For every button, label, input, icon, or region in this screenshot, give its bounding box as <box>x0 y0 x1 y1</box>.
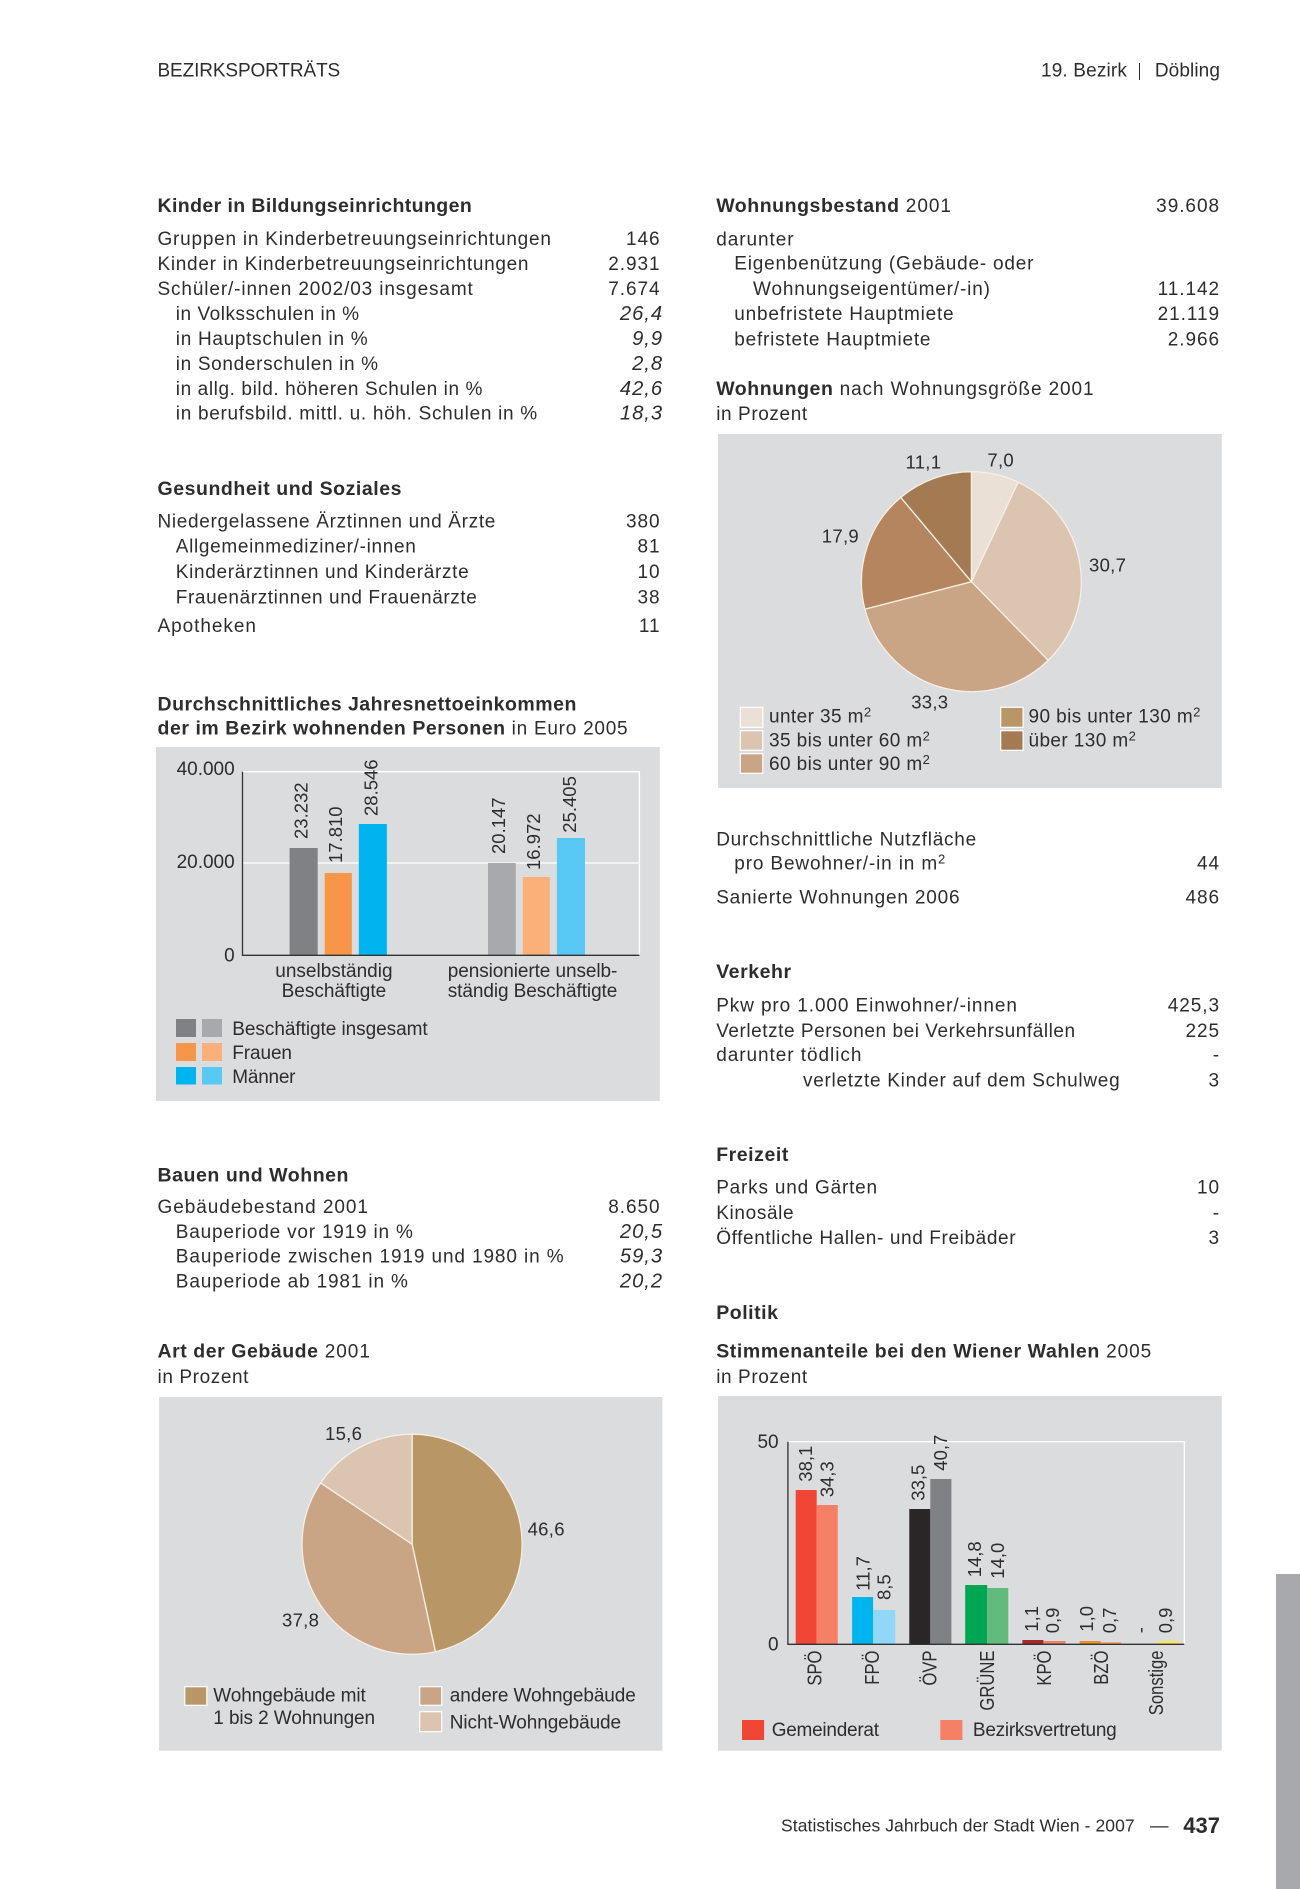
section: Freizeit: Öffentliche Hallen- und Freibäder <box>716 1228 1016 1249</box>
section: Verkehr <box>716 961 1220 1091</box>
election legend <box>742 1720 1116 1741</box>
dwelling legend: 2 <box>923 729 930 744</box>
panel: election bar chart <box>718 1396 1222 1751</box>
income value labels: 16.972 <box>523 813 544 870</box>
election value labels: 1,1 <box>1021 1606 1042 1632</box>
section: Kinder in Bildungseinrichtungen: 2.931 <box>608 254 660 275</box>
page header: 19. Bezirk <box>1041 61 1127 82</box>
dwelling legend: 2 <box>923 752 930 767</box>
heading: Art der Gebäude: Art der Gebäude 2001 <box>158 1340 371 1362</box>
section: Gesundheit und Soziales: 81 <box>637 537 660 558</box>
income value labels <box>290 759 580 870</box>
heading: Art der Gebäude: in Prozent <box>158 1367 249 1388</box>
section: Kinder in Bildungseinrichtungen: in Volksschulen in % <box>176 304 360 325</box>
election axis labels: 50 <box>757 1432 779 1453</box>
building legend: 1 bis 2 Wohnungen <box>213 1708 375 1729</box>
dwelling legend: über 130 m <box>1028 731 1129 752</box>
election bars <box>796 1479 1179 1644</box>
election value labels: 0,9 <box>1042 1608 1063 1633</box>
page footer <box>781 1813 1220 1838</box>
page footer: Statistisches Jahrbuch der Stadt Wien - 2007 <box>781 1816 1135 1836</box>
section: Kinder in Bildungseinrichtungen: 26,4 <box>619 303 663 325</box>
text block: Nutzfläche und Sanierung: Durchschnittliche Nutzfläche <box>716 830 977 850</box>
heading: Stimmenanteile: in Prozent <box>716 1367 808 1388</box>
heading: Stimmenanteile: Stimmenanteile bei den Wiener Wahlen 2005 <box>716 1340 1152 1362</box>
section: Kinder in Bildungseinrichtungen: 18,3 <box>620 402 663 424</box>
section: Freizeit: Parks und Gärten <box>716 1178 878 1199</box>
section: Gesundheit und Soziales: 10 <box>637 562 660 583</box>
section: Verkehr: darunter tödlich <box>716 1045 862 1066</box>
section: Wohnungsbestand: 21.119 <box>1158 304 1220 325</box>
election value labels: 33,5 <box>908 1465 929 1501</box>
section: Bauen und Wohnen: Bauperiode ab 1981 in % <box>176 1272 409 1293</box>
heading: Jahresnettoeinkommen: der im Bezirk wohnenden Personen in Euro 2005 <box>158 718 628 740</box>
dwelling legend: 2 <box>1129 729 1136 744</box>
income value labels: 23.232 <box>290 782 311 839</box>
section: Freizeit <box>716 1144 1220 1249</box>
section: Freizeit: 10 <box>1197 1178 1220 1199</box>
heading: Wohnungen nach Wohnungsgröße: in Prozent <box>716 404 808 425</box>
election value labels: 40,7 <box>930 1435 951 1471</box>
election value labels: 14,0 <box>987 1543 1008 1579</box>
section: Kinder in Bildungseinrichtungen: in allg. bild. höheren Schulen in % <box>176 379 483 400</box>
income bars <box>290 824 585 955</box>
dwelling legend: 35 bis unter 60 m <box>769 731 923 752</box>
section: Bauen und Wohnen: Bauen und Wohnen <box>158 1165 349 1187</box>
section: Kinder in Bildungseinrichtungen: Kinder in Kinderbetreuungseinrichtungen <box>158 254 529 275</box>
income legend: Beschäftigte insgesamt <box>232 1019 428 1040</box>
section: Bauen und Wohnen <box>158 1165 663 1293</box>
text block: Nutzfläche und Sanierung: 44 <box>1197 854 1220 875</box>
section: Gesundheit und Soziales: Kinderärztinnen und Kinderärzte <box>176 562 469 583</box>
section: Gesundheit und Soziales: Allgemeinmediziner/-innen <box>176 537 416 558</box>
heading: Stimmenanteile <box>716 1340 1152 1388</box>
section: Gesundheit und Soziales: 38 <box>637 587 660 608</box>
section: Bauen und Wohnen: 8.650 <box>608 1197 660 1218</box>
income axis labels <box>177 759 617 1002</box>
election value labels: 0,9 <box>1155 1608 1176 1633</box>
heading: Wohnungen nach Wohnungsgröße: Wohnungen nach Wohnungsgröße 2001 <box>716 378 1094 400</box>
section: Verkehr: verletzte Kinder auf dem Schulweg <box>803 1070 1120 1091</box>
pie value labels <box>822 450 1126 712</box>
pie value labels: 46,6 <box>528 1519 565 1540</box>
section: Verkehr: Verletzte Personen bei Verkehrsunfällen <box>716 1021 1076 1042</box>
section: Gesundheit und Soziales: Apotheken <box>158 616 257 637</box>
panel: income bar chart <box>156 747 660 1101</box>
section: Wohnungsbestand: darunter <box>716 230 795 250</box>
section: Bauen und Wohnen: Gebäudebestand 2001 <box>158 1197 369 1218</box>
text block: Nutzfläche und Sanierung: 486 <box>1185 887 1220 908</box>
sidebar tab <box>1276 1574 1300 1889</box>
election value labels: 1,0 <box>1076 1606 1097 1632</box>
section: Kinder in Bildungseinrichtungen: Schüler/-innen 2002/03 insgesamt <box>158 279 474 300</box>
page header: BEZIRKSPORTRÄTS <box>158 61 340 82</box>
pie value labels: 17,9 <box>822 526 859 546</box>
income value labels: 25.405 <box>559 776 580 833</box>
section: Wohnungsbestand: Wohnungseigentümer/-in) <box>753 279 991 300</box>
election value labels: 0,7 <box>1099 1608 1120 1633</box>
heading: Politik: Politik <box>716 1302 779 1324</box>
section: Kinder in Bildungseinrichtungen: in berufsbild. mittl. u. höh. Schulen in % <box>176 404 538 424</box>
income axis labels: pensionierte unselb- <box>448 961 617 982</box>
section: Gesundheit und Soziales: Gesundheit und Soziales <box>158 478 402 500</box>
dwelling legend <box>740 705 1200 775</box>
pie value labels: 15,6 <box>325 1423 362 1444</box>
building legend: Wohngebäude mit <box>213 1686 366 1707</box>
pie value labels: 11,1 <box>906 452 941 472</box>
section: Kinder in Bildungseinrichtungen: in Sonderschulen in % <box>176 354 379 375</box>
section: Verkehr: - <box>1213 1045 1220 1066</box>
section: Gesundheit und Soziales <box>158 478 660 637</box>
pie value labels: 7,0 <box>987 450 1014 470</box>
section: Wohnungsbestand: Wohnungsbestand 2001 <box>716 195 952 217</box>
dwelling legend: 2 <box>864 705 871 720</box>
election party labels: Sonstige <box>1145 1650 1167 1715</box>
section: Verkehr: 225 <box>1185 1021 1220 1042</box>
election value labels: 8,5 <box>874 1574 894 1600</box>
section: Gesundheit und Soziales: 11 <box>639 616 660 637</box>
pie: building types <box>302 1434 522 1654</box>
election party labels: BZÖ <box>1089 1650 1112 1685</box>
income value labels: 28.546 <box>360 759 381 816</box>
section: Wohnungsbestand: 11.142 <box>1158 279 1220 300</box>
heading: Jahresnettoeinkommen: Durchschnittliches Jahresnettoeinkommen <box>158 694 577 716</box>
section: Verkehr: Verkehr <box>716 961 792 983</box>
section: Bauen und Wohnen: Bauperiode zwischen 1919 und 1980 in % <box>176 1246 565 1267</box>
section: Verkehr: Pkw pro 1.000 Einwohner/-innen <box>716 996 1018 1017</box>
election value labels: - <box>1130 1627 1150 1633</box>
heading: Art der Gebäude <box>158 1340 371 1388</box>
income axis labels: unselbständig <box>275 961 393 982</box>
panel: dwelling size pie chart <box>718 434 1222 788</box>
election legend: Bezirksvertretung <box>973 1720 1116 1741</box>
election value labels: 38,1 <box>795 1446 816 1482</box>
income axis labels: 20.000 <box>177 852 235 873</box>
election axis labels: 0 <box>768 1635 779 1656</box>
text block: Nutzfläche und Sanierung: pro Bewohner/-in in m <box>734 854 938 875</box>
pie value labels: 30,7 <box>1089 554 1126 576</box>
income axis labels: 0 <box>224 946 235 967</box>
section: Freizeit: Kinosäle <box>716 1203 794 1224</box>
pie value labels <box>282 1423 565 1631</box>
section: Bauen und Wohnen: 20,5 <box>619 1221 663 1243</box>
election party labels: SPÖ <box>803 1650 826 1686</box>
section: Kinder in Bildungseinrichtungen: 9,9 <box>632 328 663 350</box>
election party labels: KPÖ <box>1032 1650 1055 1686</box>
section: Kinder in Bildungseinrichtungen: 7.674 <box>608 279 660 300</box>
income legend <box>176 1019 428 1088</box>
income value labels: 17.810 <box>325 806 346 863</box>
section: Freizeit: 3 <box>1208 1228 1220 1249</box>
section: Kinder in Bildungseinrichtungen: 146 <box>626 229 660 250</box>
income axis labels: Beschäftigte <box>282 981 386 1002</box>
dwelling legend: 2 <box>1193 705 1200 720</box>
section: Kinder in Bildungseinrichtungen: 2,8 <box>631 353 663 375</box>
page header: Döbling <box>1155 61 1220 82</box>
page footer: — <box>1150 1815 1169 1836</box>
income axis labels: ständig Beschäftigte <box>448 981 617 1002</box>
section: Kinder in Bildungseinrichtungen: 42,6 <box>620 378 663 400</box>
section: Freizeit: Freizeit <box>716 1144 789 1166</box>
election value labels: 34,3 <box>817 1461 838 1497</box>
section: Wohnungsbestand: befristete Hauptmiete <box>734 330 931 350</box>
income axis labels: 40.000 <box>177 759 235 780</box>
election value labels: 11,7 <box>852 1556 874 1591</box>
section: Kinder in Bildungseinrichtungen <box>158 195 663 424</box>
text block: Nutzfläche und Sanierung: 2 <box>938 852 945 867</box>
election party labels <box>803 1650 1167 1715</box>
section: Wohnungsbestand: 39.608 <box>1156 196 1220 217</box>
dwelling legend: 90 bis unter 130 m <box>1028 707 1193 728</box>
text block: Nutzfläche und Sanierung: Sanierte Wohnungen 2006 <box>716 887 960 908</box>
section: Gesundheit und Soziales: 380 <box>626 511 660 532</box>
section: Bauen und Wohnen: 20,2 <box>619 1271 663 1293</box>
text block: Nutzfläche und Sanierung <box>716 830 1220 908</box>
panel: building type pie chart <box>159 1397 662 1751</box>
building legend: Nicht-Wohngebäude <box>450 1712 621 1733</box>
section: Wohnungsbestand <box>716 195 1220 350</box>
section: Bauen und Wohnen: 59,3 <box>620 1245 663 1267</box>
election axis labels <box>757 1432 779 1656</box>
income legend: Männer <box>232 1067 296 1088</box>
section: Verkehr: 3 <box>1208 1070 1220 1091</box>
section: Kinder in Bildungseinrichtungen: Kinder in Bildungseinrichtungen <box>158 195 472 217</box>
building legend <box>185 1686 636 1733</box>
election party labels: ÖVP <box>918 1650 941 1686</box>
heading: Jahresnettoeinkommen <box>158 694 628 740</box>
section: Verkehr: 425,3 <box>1168 996 1220 1017</box>
dwelling legend: unter 35 m <box>769 707 864 728</box>
page footer: 437 <box>1183 1813 1220 1838</box>
election value labels: 14,8 <box>964 1541 985 1577</box>
election value labels <box>795 1435 1176 1633</box>
dwelling legend: 60 bis unter 90 m <box>769 754 923 775</box>
section: Gesundheit und Soziales: Niedergelassene Ärztinnen und Ärzte <box>158 511 496 532</box>
income legend: Frauen <box>232 1043 292 1064</box>
page header <box>158 61 1220 82</box>
pie value labels: 33,3 <box>911 692 948 712</box>
election party labels: FPÖ <box>861 1650 884 1685</box>
election legend: Gemeinderat <box>772 1720 880 1741</box>
section: Freizeit: - <box>1213 1203 1220 1224</box>
section: Gesundheit und Soziales: Frauenärztinnen und Frauenärzte <box>176 587 477 608</box>
section: Kinder in Bildungseinrichtungen: in Hauptschulen in % <box>176 329 368 350</box>
heading: Wohnungen nach Wohnungsgröße <box>716 378 1094 425</box>
section: Wohnungsbestand: unbefristete Hauptmiete <box>734 304 954 325</box>
income value labels: 20.147 <box>488 797 509 854</box>
pie value labels: 37,8 <box>282 1610 319 1631</box>
section: Wohnungsbestand: 2.966 <box>1168 330 1220 350</box>
section: Bauen und Wohnen: Bauperiode vor 1919 in % <box>176 1222 414 1243</box>
pie: dwelling sizes <box>861 472 1081 692</box>
section: Kinder in Bildungseinrichtungen: Gruppen in Kinderbetreuungseinrichtungen <box>158 229 552 250</box>
section: Wohnungsbestand: Eigenbenützung (Gebäude- oder <box>734 254 1034 275</box>
election party labels: GRÜNE <box>976 1650 998 1711</box>
building legend: andere Wohngebäude <box>450 1686 636 1707</box>
